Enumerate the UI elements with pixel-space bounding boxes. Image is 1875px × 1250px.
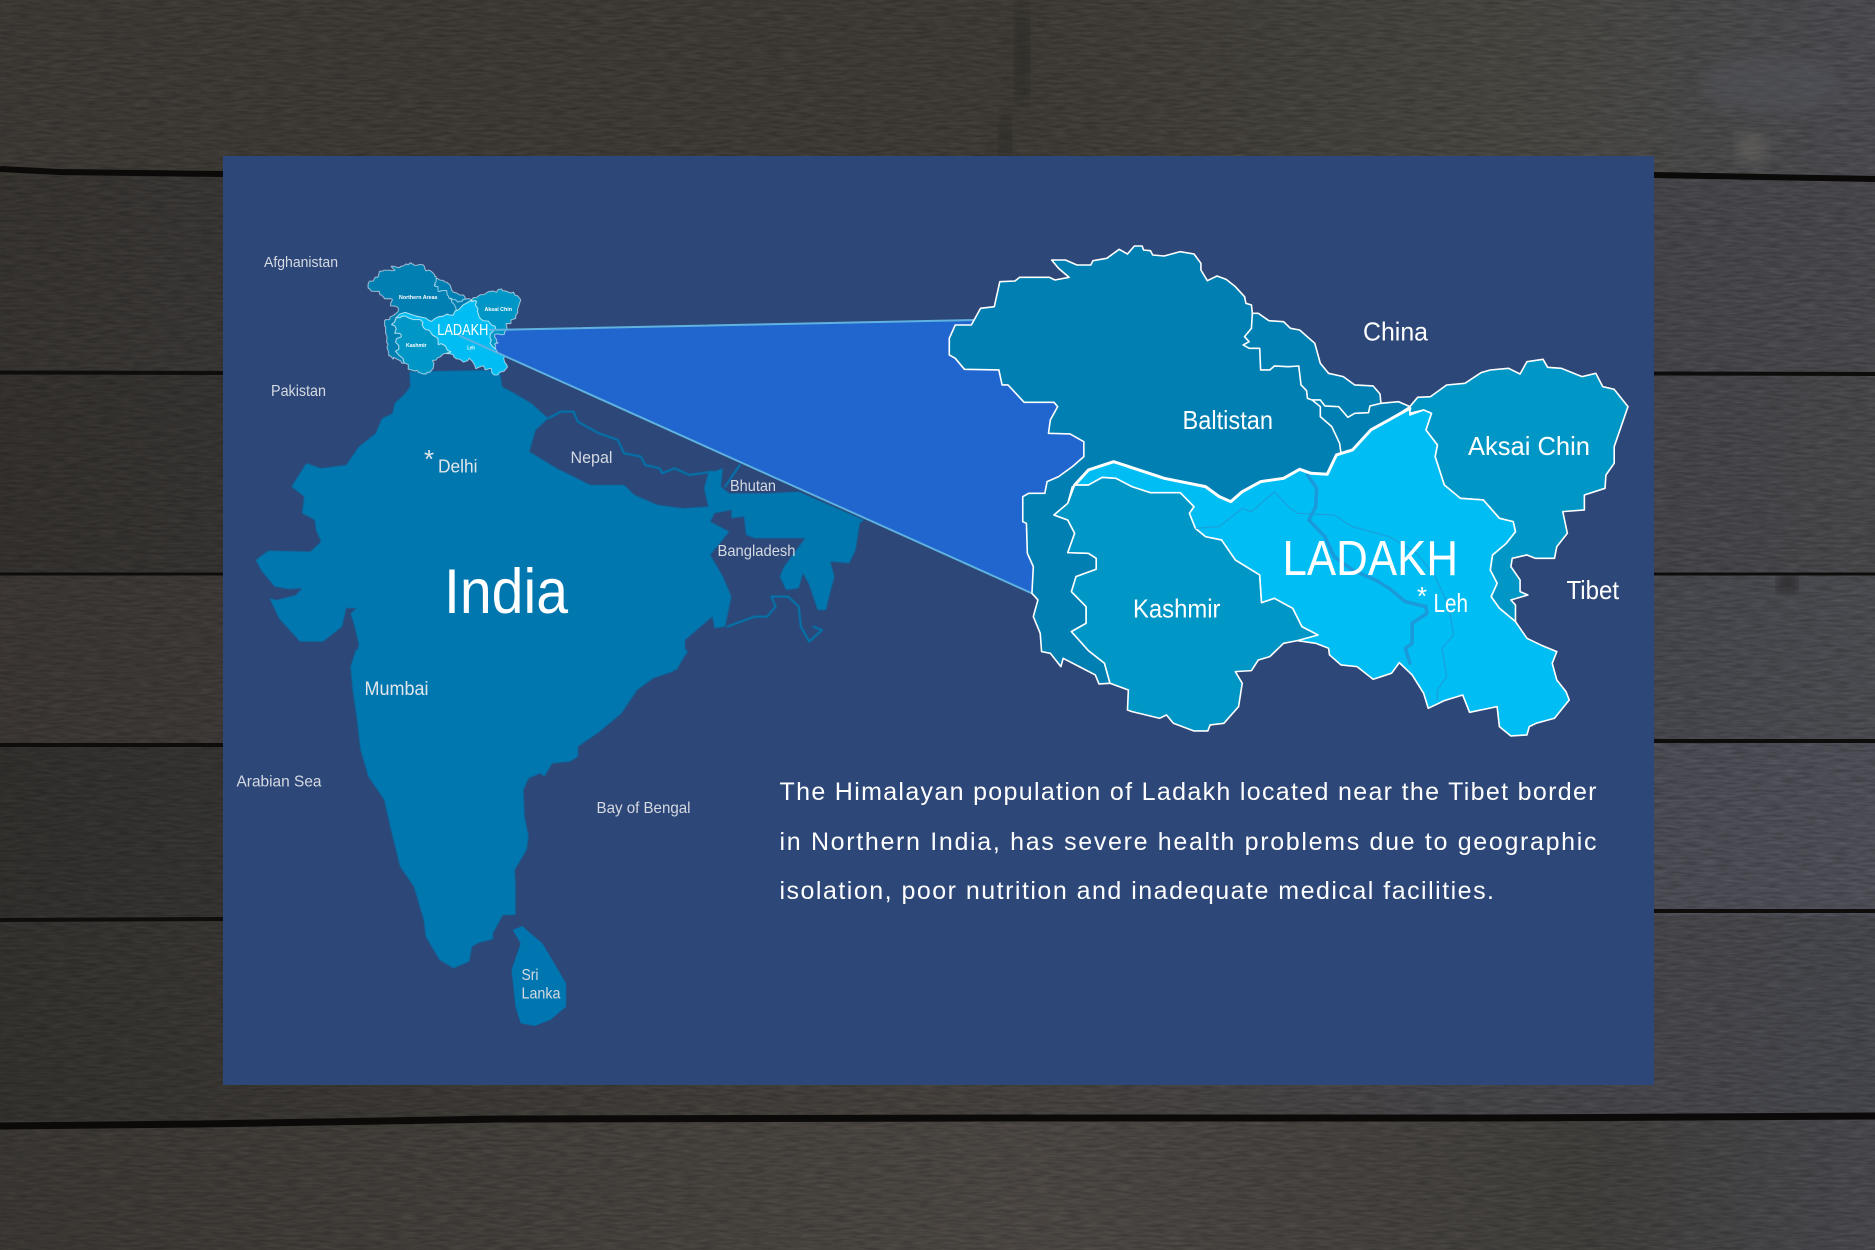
- region: Kashmir: [1054, 477, 1318, 731]
- labels: India cities: Delhi: [438, 456, 478, 476]
- labels: enlarged map regions: Aksai Chin: [1468, 431, 1590, 461]
- labels: India cities: [364, 444, 478, 700]
- text block: description: isolation, poor nutrition and inadequate medical facilities.: [780, 877, 1494, 905]
- labels: neighbouring countries and seas: Bhutan: [730, 478, 776, 495]
- labels: neighbouring countries and seas: Sri: [522, 967, 538, 984]
- labels: enlarged map regions: Tibet: [1566, 575, 1620, 605]
- labels: neighbouring countries and seas: Bay of Bengal: [596, 800, 690, 817]
- map: Sri Lanka: [512, 926, 566, 1026]
- labels: enlarged map regions: China: [1363, 316, 1429, 346]
- labels: India cities: Mumbai: [364, 679, 428, 700]
- labels: enlarged map regions: *: [1417, 581, 1427, 611]
- region: Baltistan: [949, 246, 1410, 684]
- mini map: Jammu and Kashmir regions: [368, 263, 521, 375]
- region: Baltistan inner borders: [1243, 313, 1381, 453]
- rivers in Ladakh: [1075, 408, 1453, 700]
- labels: India cities: *: [424, 444, 434, 474]
- region: Aksai Chin: [1410, 359, 1628, 622]
- panel: navy map card: [223, 156, 1654, 1085]
- heading: LADAKH: LADAKH: [1282, 532, 1458, 586]
- labels: mini map: Northern Areas: [399, 295, 438, 301]
- text block: description: in Northern India, has severe health problems due to geographic: [780, 828, 1596, 856]
- labels: neighbouring countries and seas: [236, 254, 796, 1002]
- labels: neighbouring countries and seas: Lanka: [522, 986, 561, 1002]
- labels: neighbouring countries and seas: Bangladesh: [718, 543, 796, 560]
- map: India landmass: [256, 370, 864, 968]
- labels: enlarged map regions: Kashmir: [1133, 594, 1221, 624]
- labels: mini map: Kashmir: [406, 343, 427, 349]
- text block: description: [780, 778, 1596, 905]
- enlarged map: Jammu and Kashmir: [949, 246, 1628, 736]
- labels: mini map: [399, 295, 513, 352]
- text block: description: The Himalayan population of Ladakh located near the Tibet border: [780, 778, 1596, 806]
- labels: enlarged map regions: Leh: [1434, 588, 1468, 618]
- labels: neighbouring countries and seas: Nepal: [570, 448, 612, 467]
- labels: neighbouring countries and seas: Arabian Sea: [236, 774, 322, 790]
- region: Ladakh: [1075, 408, 1569, 736]
- labels: mini map: Aksai Chin: [484, 307, 513, 313]
- heading: India: India: [444, 557, 569, 627]
- labels: neighbouring countries and seas: Afghanistan: [264, 254, 338, 271]
- labels: enlarged map regions: [1133, 316, 1620, 624]
- zoom wedge outline lines: [458, 320, 1040, 597]
- labels: mini map: Leh: [467, 346, 475, 352]
- labels: mini map: LADAKH: [437, 322, 488, 339]
- labels: neighbouring countries and seas: Pakistan: [271, 383, 326, 400]
- zoom wedge connecting mini map to enlarged map: [458, 320, 1100, 600]
- labels: enlarged map regions: Baltistan: [1182, 405, 1273, 435]
